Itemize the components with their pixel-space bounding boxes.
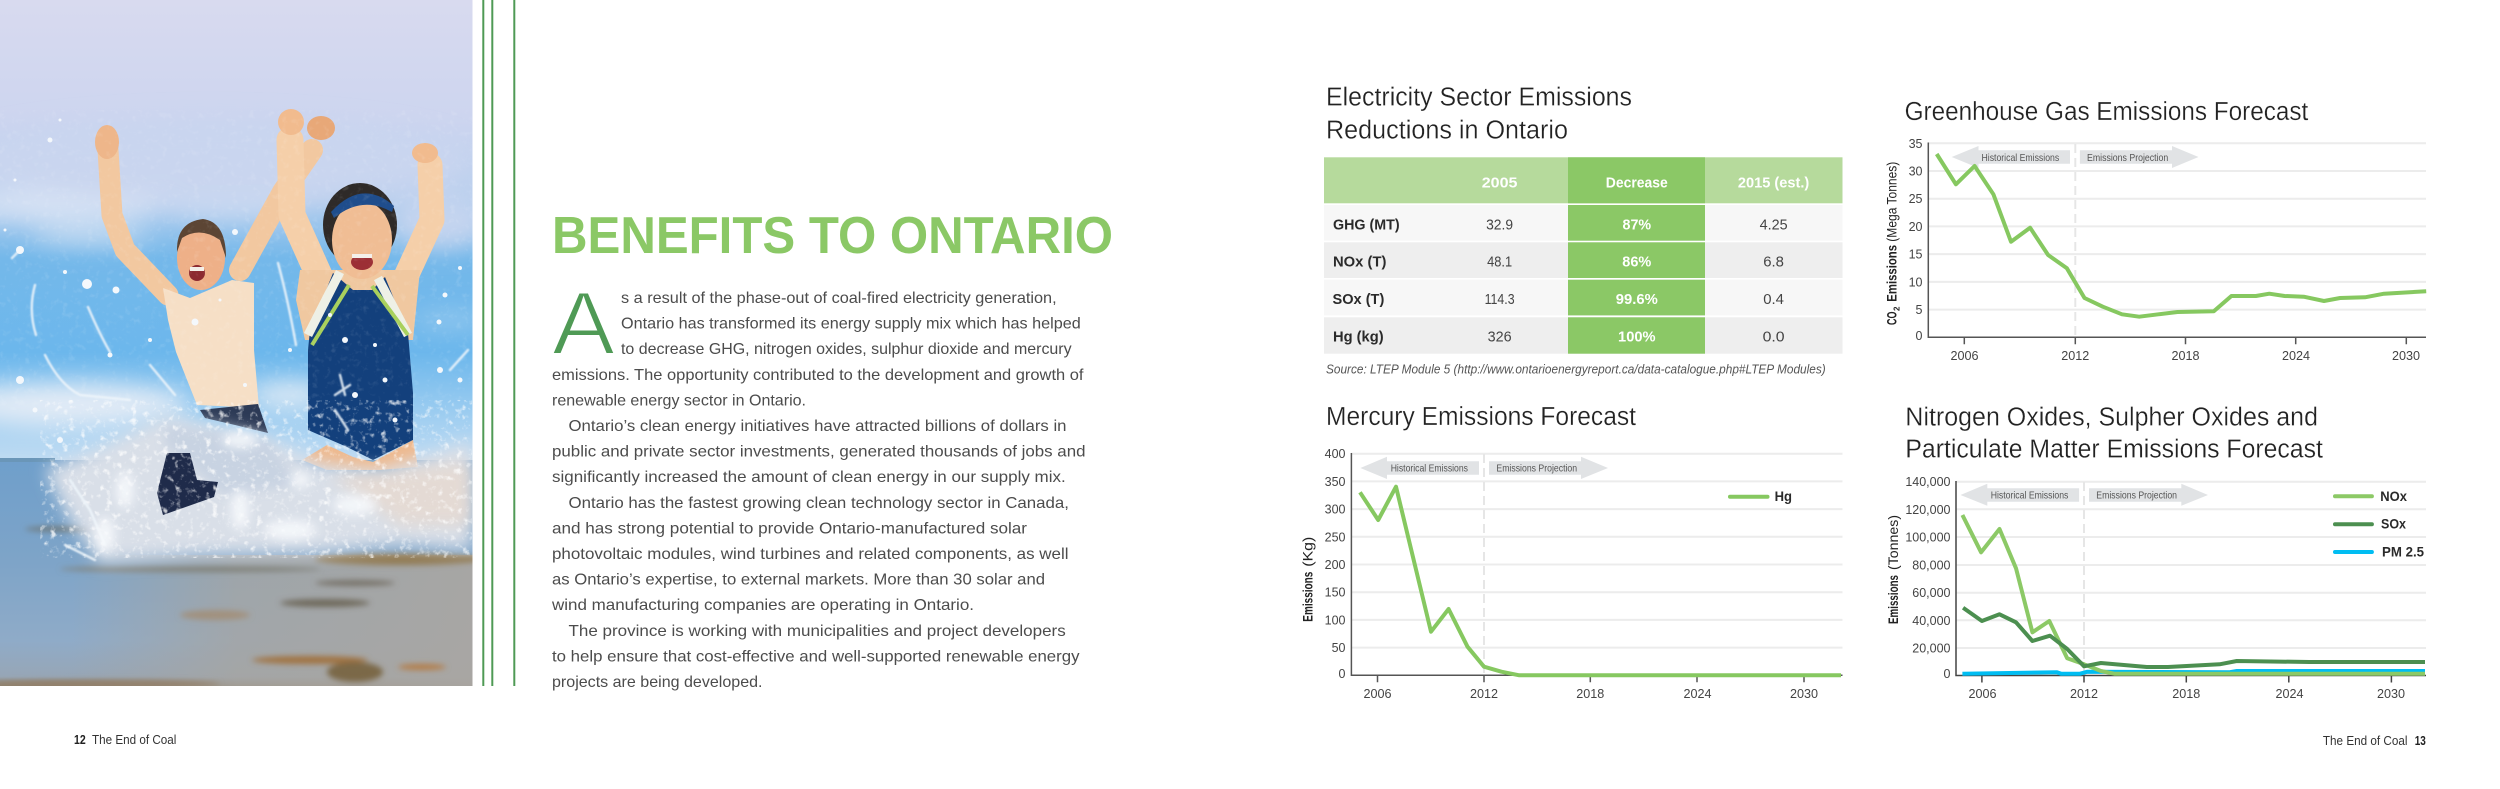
data line: PM 2.5 <box>1962 671 2425 674</box>
x axis labels: 2018 <box>1576 687 1604 701</box>
y axis title: (Kg) <box>1301 537 1316 567</box>
body text: emissions. The opportunity contributed to the development and growth of <box>552 367 1084 384</box>
body text: renewable energy sector in Ontario. <box>552 392 806 409</box>
chart heading: Particulate Matter Emissions Forecast <box>1905 436 2323 464</box>
x axis labels: 2012 <box>1470 687 1498 701</box>
data line: Hg <box>1360 487 1841 675</box>
y axis labels: 35 <box>1909 137 1923 151</box>
y axis labels: 60,000 <box>1912 586 1951 600</box>
arrow: historical emissions <box>1952 146 2070 168</box>
x axis labels: 2024 <box>2282 349 2310 363</box>
arrow: emissions projection: Emissions Projection <box>2096 490 2177 502</box>
arrow: emissions projection: Emissions Projection <box>1496 463 1577 475</box>
y axis labels: 40,000 <box>1912 614 1951 628</box>
chart heading <box>1905 404 2323 464</box>
photo: children splashing in a lake <box>0 0 490 688</box>
panel: emissions reductions table <box>1324 84 1842 376</box>
arrow: emissions projection: Emissions Projection <box>2087 152 2168 164</box>
table row: NOx: 6.8 <box>1763 255 1784 271</box>
panel: mercury emissions forecast <box>1301 403 1842 701</box>
y axis labels: 20,000 <box>1912 642 1951 656</box>
line chart: NOx SOx PM <box>1886 475 2426 701</box>
x axis labels: 2024 <box>2275 687 2304 701</box>
y axis labels: 250 <box>1325 530 1346 544</box>
x axis labels: 2018 <box>2171 349 2200 363</box>
table row: Hg: Hg (kg) <box>1333 330 1384 346</box>
axes <box>1351 453 1842 682</box>
table row: Hg <box>1324 317 1842 354</box>
x axis labels <box>1950 349 2420 363</box>
y axis labels <box>1325 447 1346 681</box>
data line: SOx <box>1963 608 2425 667</box>
legend: NOx SOx PM 2.5: PM 2.5 <box>2382 544 2424 560</box>
right page footer: The End of Coal <box>2323 734 2408 748</box>
y axis title: Emissions <box>1301 572 1316 622</box>
y axis labels: 25 <box>1909 192 1923 206</box>
x axis labels: 2030 <box>2392 349 2420 363</box>
y axis labels: 15 <box>1909 248 1923 262</box>
arrow: emissions projection <box>1489 457 1608 479</box>
table header row: Decrease <box>1606 176 1668 192</box>
body text: photovoltaic modules, wind turbines and related components, as well <box>552 546 1068 563</box>
line chart: GHG <box>1885 137 2426 363</box>
table row: GHG <box>1324 205 1842 241</box>
water splash <box>0 110 472 563</box>
table header row <box>1324 157 1842 203</box>
girl <box>278 109 438 470</box>
chart heading: Greenhouse Gas Emissions Forecast <box>1905 98 2308 126</box>
x axis labels: 2030 <box>2377 687 2405 701</box>
table row: SOx: 99.6% <box>1616 292 1658 308</box>
data line: CO2 <box>1937 154 2426 317</box>
table row: GHG: GHG (MT) <box>1333 217 1400 233</box>
y axis title: (Tonnes) <box>1886 515 1901 570</box>
table heading <box>1326 84 1632 144</box>
arrow: historical emissions <box>1360 457 1479 479</box>
splash streams and droplets <box>12 250 468 560</box>
y axis title: CO <box>1885 312 1900 325</box>
table row: Hg: 100% <box>1618 330 1656 346</box>
y axis labels: 150 <box>1325 586 1346 600</box>
y axis labels <box>1905 475 1951 681</box>
body text: The province is working with municipalities and project developers <box>568 623 1066 640</box>
y axis labels: 20 <box>1909 220 1923 234</box>
y axis labels: 10 <box>1909 275 1923 289</box>
y axis labels: 140,000 <box>1905 475 1951 489</box>
body text: s a result of the phase-out of coal-fired electricity generation, <box>621 290 1057 307</box>
left page footer: 12 <box>74 733 86 747</box>
chart heading: Nitrogen Oxides, Sulpher Oxides and <box>1905 404 2318 432</box>
arrow: emissions projection <box>2089 484 2208 506</box>
table row: SOx: 0.4 <box>1763 292 1784 308</box>
girl's head <box>332 201 392 279</box>
boy's lower shorts <box>157 453 218 515</box>
body text: Ontario has the fastest growing clean technology sector in Canada, <box>568 495 1069 512</box>
table row: Hg: 0.0 <box>1763 330 1785 346</box>
body text: projects are being developed. <box>552 674 762 691</box>
x axis labels: 2024 <box>1683 687 1712 701</box>
x axis labels: 2012 <box>2061 349 2089 363</box>
y axis labels: 0 <box>1944 667 1951 681</box>
table header row: 2015 (est.) <box>1738 176 1809 192</box>
y axis labels: 0 <box>1916 329 1923 343</box>
y axis title <box>1885 162 1902 325</box>
body text: wind manufacturing companies are operating in Ontario. <box>551 597 974 614</box>
girl's swimsuit <box>308 273 413 460</box>
y axis labels: 80,000 <box>1912 558 1951 572</box>
girl's shoulders <box>296 270 420 340</box>
girl's hair <box>323 183 397 256</box>
arrow: historical emissions: Historical Emissions <box>1991 490 2068 502</box>
y axis title: Emissions <box>1885 245 1900 302</box>
legend: Hg <box>1730 488 1792 504</box>
table row: Hg: 326 <box>1488 330 1512 346</box>
girl's arms <box>290 140 432 285</box>
y axis labels: 0 <box>1339 667 1346 681</box>
drop cap: A <box>552 273 616 373</box>
table row: SOx: 114.3 <box>1485 292 1515 308</box>
legend: NOx SOx PM 2.5: SOx <box>2381 516 2406 532</box>
y axis labels: 30 <box>1909 164 1923 178</box>
x axis labels: 2006 <box>1363 687 1392 701</box>
lake water <box>0 460 472 686</box>
y axis labels <box>1909 137 1923 343</box>
body text: and has strong potential to provide Ontario-manufactured solar <box>552 520 1028 537</box>
arrow: historical emissions <box>1960 484 2079 506</box>
chart heading: Mercury Emissions Forecast <box>1326 403 1636 431</box>
arrow: historical emissions: Historical Emissions <box>1391 463 1468 475</box>
bright foam highlights <box>95 432 377 553</box>
body text: Ontario’s clean energy initiatives have attracted billions of dollars in <box>568 418 1066 435</box>
swimsuit straps <box>308 272 408 335</box>
axes <box>1956 481 2426 682</box>
clouds in the sky <box>0 166 472 438</box>
arrow: historical emissions: Historical Emissions <box>1982 152 2059 164</box>
arrow: emissions projection <box>2080 146 2198 168</box>
y axis title <box>1886 515 1901 624</box>
y axis labels: 120,000 <box>1905 503 1951 517</box>
main heading: BENEFITS TO ONTARIO <box>552 207 1113 265</box>
y axis title: Emissions <box>1886 575 1901 624</box>
boy's torso <box>163 280 259 408</box>
x axis labels <box>1363 687 1818 701</box>
body text: to decrease GHG, nitrogen oxides, sulphur dioxide and mercury <box>621 341 1072 358</box>
boy's head <box>177 232 225 290</box>
y axis labels: 350 <box>1325 475 1346 489</box>
decorative green vertical rules <box>483 0 514 686</box>
x axis labels <box>1968 687 2405 701</box>
body text: public and private sector investments, generated thousands of jobs and <box>552 444 1086 461</box>
table row: NOx <box>1324 242 1842 278</box>
boy <box>95 116 335 433</box>
table source note: Source: LTEP Module 5 (http://www.ontarioenergyreport.ca/data-catalogue.php#LTEP Modules) <box>1326 362 1826 376</box>
y axis labels: 200 <box>1325 558 1346 572</box>
table header row: 2005 <box>1482 176 1517 192</box>
x axis labels: 2030 <box>1790 687 1818 701</box>
body text: as Ontario’s expertise, to external markets. More than 30 solar and <box>552 572 1045 589</box>
y axis labels: 100,000 <box>1905 530 1951 544</box>
body text <box>551 290 1086 691</box>
table heading: Electricity Sector Emissions <box>1326 84 1632 112</box>
table row: GHG: 4.25 <box>1760 217 1788 233</box>
x axis labels: 2006 <box>1950 349 1979 363</box>
y axis labels: 100 <box>1325 613 1346 627</box>
data line: NOx <box>1962 515 2425 674</box>
table row: NOx: NOx (T) <box>1333 255 1387 271</box>
boy's swim shorts <box>200 404 268 433</box>
y axis title: 2 <box>1892 306 1902 311</box>
line chart: mercury <box>1301 447 1842 701</box>
y axis labels: 400 <box>1325 447 1346 461</box>
legend: NOx SOx PM 2.5 <box>2335 488 2424 560</box>
panel: NOx, SOx and PM emissions forecast <box>1886 404 2426 701</box>
y axis labels: 50 <box>1332 641 1346 655</box>
table row: SOx <box>1324 280 1842 315</box>
y axis title: (Mega Tonnes) <box>1885 162 1900 242</box>
y axis labels: 300 <box>1325 503 1346 517</box>
x axis labels: 2012 <box>2070 687 2098 701</box>
table row: NOx: 86% <box>1622 255 1651 271</box>
y axis labels: 5 <box>1916 303 1923 317</box>
body text: Ontario has transformed its energy supply mix which has helped <box>621 316 1081 333</box>
table row: NOx: 48.1 <box>1487 255 1512 271</box>
x axis labels: 2006 <box>1968 687 1997 701</box>
body text: to help ensure that cost-effective and well-supported renewable energy <box>552 648 1080 665</box>
water reflections <box>0 526 485 688</box>
table row: GHG: 32.9 <box>1486 217 1513 233</box>
girl's legs <box>302 440 418 470</box>
x axis labels: 2018 <box>2172 687 2200 701</box>
table row: SOx: SOx (T) <box>1332 292 1384 308</box>
legend: Hg: Hg <box>1775 488 1792 504</box>
left page footer: The End of Coal <box>92 733 176 747</box>
panel: greenhouse gas emissions forecast <box>1885 98 2426 363</box>
right page footer: 13 <box>2415 734 2426 748</box>
boy's arms <box>108 150 312 295</box>
body text: significantly increased the amount of clean energy in our supply mix. <box>552 469 1066 486</box>
axes <box>1928 142 2426 344</box>
table row: GHG: 87% <box>1622 217 1651 233</box>
legend: NOx SOx PM 2.5: NOx <box>2380 488 2407 504</box>
table heading: Reductions in Ontario <box>1326 116 1568 144</box>
